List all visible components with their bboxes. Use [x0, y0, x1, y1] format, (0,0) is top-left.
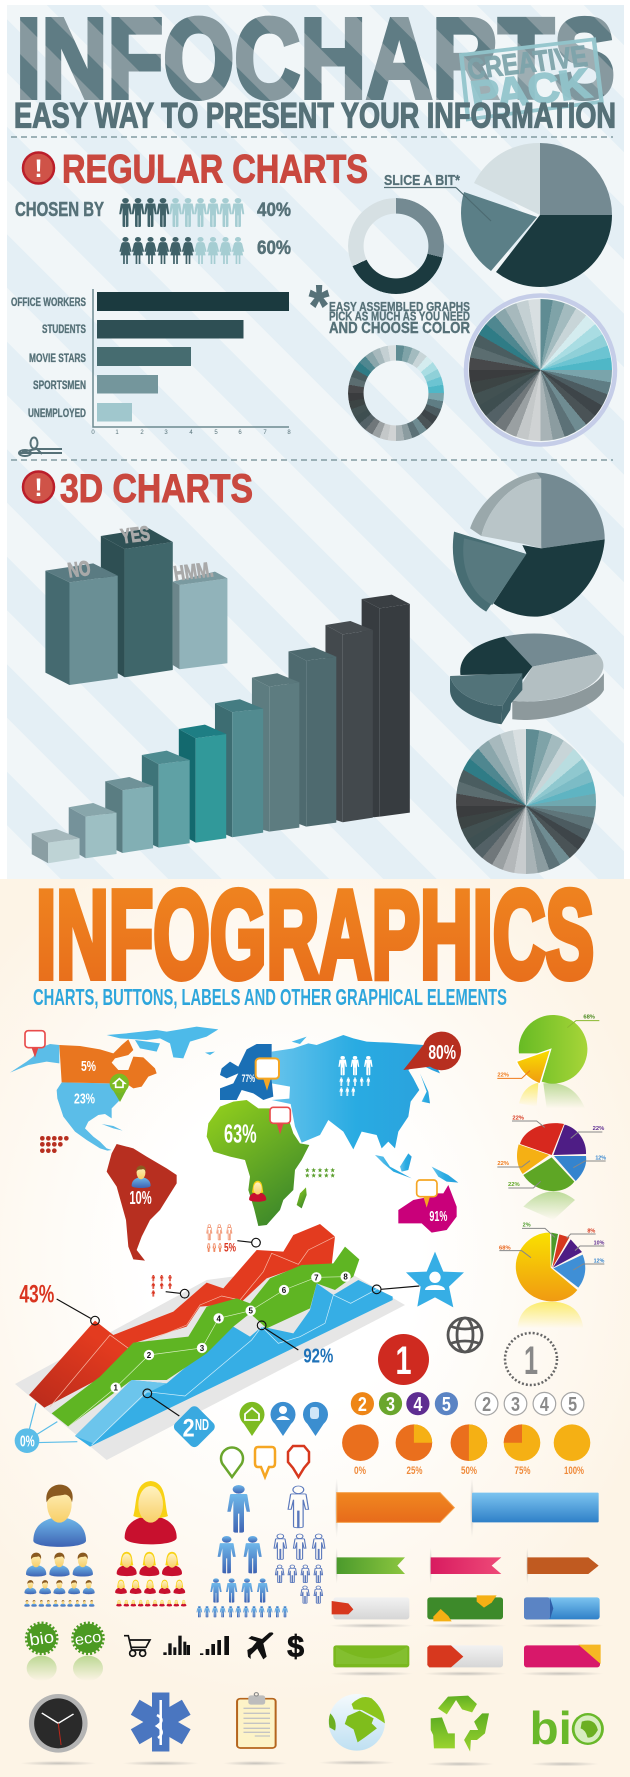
pie: green and yellow: 22%: [497, 1072, 509, 1078]
icon: clock: [29, 1694, 88, 1753]
world map: [10, 1027, 461, 1261]
numbered circles colored: [351, 1392, 458, 1416]
heading: 3d charts: !: [34, 474, 43, 502]
progress circles: 75%: [514, 1465, 531, 1477]
pie: yellow majority: 8%: [587, 1228, 595, 1234]
bar chart: 2: [140, 430, 144, 436]
label: 43 percent: 43%: [19, 1281, 54, 1309]
icon: scissors: [19, 438, 62, 456]
person icon on south america: [132, 1166, 151, 1188]
pin icons filled: [240, 1402, 328, 1436]
map: canada: [59, 1039, 157, 1088]
3d bars: no yes hmm: [45, 521, 227, 685]
avatars and people pyramids: [24, 1481, 325, 1681]
numbered circles colored: 3: [386, 1394, 395, 1416]
male avatars: [24, 1485, 95, 1607]
map labels: 63%: [224, 1119, 257, 1149]
zero percent badge: [15, 1403, 77, 1453]
bar chart: 1: [115, 430, 119, 436]
3d pie exploded: [453, 472, 605, 617]
asterisk note: EASY ASSEMBLED GRAPHS: [329, 299, 470, 314]
people row: 40 percent: [119, 198, 244, 227]
3d pie tilted: [450, 634, 604, 724]
icon: bio: bi: [530, 1702, 572, 1754]
3d line chart: 8: [343, 1273, 348, 1282]
zero percent badge: 0%: [20, 1434, 35, 1451]
pie legend charts: [497, 1015, 606, 1328]
ribbon: green: [337, 1557, 405, 1574]
button: blue split: [524, 1597, 600, 1619]
pin icons outline: [221, 1446, 309, 1477]
bar chart: 8: [287, 430, 291, 436]
label: 92 percent: 92%: [303, 1345, 333, 1368]
callout: 80 percent: 80%: [428, 1041, 456, 1064]
diamond 2nd: [172, 1404, 217, 1449]
3d line chart: 5: [248, 1307, 253, 1316]
3d bars: no yes hmm: YES: [119, 521, 152, 548]
map labels: 91%: [429, 1208, 447, 1225]
pin: yellow australia: [417, 1180, 437, 1208]
heading: regular charts: !: [34, 155, 43, 183]
map labels: [74, 1059, 447, 1225]
icon: plane: [247, 1632, 273, 1659]
pie: yellow majority: [499, 1223, 604, 1328]
bar chart: STUDENTS: [42, 324, 86, 336]
ribbon shadows: [335, 1478, 529, 1584]
red dot grid: [40, 1136, 69, 1153]
button: gray with red arrow: [427, 1645, 503, 1667]
panel: infocharts striped background: [7, 5, 624, 879]
map: australia: [398, 1185, 457, 1233]
numbered circles outline: 3: [511, 1394, 520, 1416]
heading: regular charts: REGULAR CHARTS: [62, 148, 368, 192]
3d bars: no yes hmm: HMM.: [172, 557, 215, 585]
map: south america: [107, 1144, 177, 1261]
button shadows: [330, 1623, 603, 1676]
outline people with 5 percent: [207, 1225, 236, 1255]
number badge 1 red: [378, 1334, 429, 1385]
outline people with 5 percent: 5%: [224, 1241, 236, 1255]
bar chart: 0: [91, 430, 95, 436]
button: gray with red tag: [332, 1597, 409, 1619]
diamond 2nd: 2: [183, 1416, 195, 1443]
3d line chart: 7: [314, 1273, 319, 1282]
numbered circles outline: 5: [568, 1394, 577, 1416]
blue ribbon: [75, 1280, 393, 1447]
ribbon: brown: [527, 1557, 599, 1574]
map labels: 10%: [129, 1187, 152, 1208]
button: green plain: [333, 1645, 409, 1667]
bar chart: 7: [263, 430, 267, 436]
chosen by label: CHOSEN BY: [15, 199, 104, 221]
button: pink with yellow fold: [524, 1645, 601, 1667]
woman icon on africa: [249, 1181, 266, 1202]
map labels: 5%: [81, 1059, 96, 1075]
bar chart: 5: [214, 430, 218, 436]
pin: green home: [110, 1074, 129, 1102]
numbered circles colored: 5: [442, 1394, 451, 1416]
asterisk note: [309, 274, 470, 339]
pie: multicolor: [469, 299, 612, 441]
pie: five slices: 22%: [497, 1161, 509, 1167]
icon: rising bars: [200, 1636, 229, 1655]
bar chart: UNEMPLOYED: [28, 408, 86, 420]
pie: yellow majority: 2%: [523, 1223, 531, 1229]
map labels: 23%: [74, 1091, 95, 1107]
bar chart: MOVIE STARS: [29, 353, 86, 365]
40 percent label: 40%: [257, 200, 291, 221]
slice a bit annotation: SLICE A BIT*: [384, 172, 460, 189]
button: green with yellow corners: [427, 1595, 503, 1621]
pie: yellow majority: 10%: [594, 1240, 604, 1246]
map: europe: [220, 1044, 273, 1100]
map: asia: [272, 1035, 458, 1183]
icon: cart: [124, 1636, 150, 1656]
numbered circles colored: 4: [413, 1394, 423, 1416]
icon: bars: [163, 1636, 190, 1655]
ground shadows: [20, 1760, 599, 1766]
numbered circles colored: 2: [358, 1394, 367, 1416]
icon: clipboard: [237, 1693, 276, 1748]
numbered circles outline: [475, 1392, 584, 1416]
multicolor pie ring: [466, 296, 615, 444]
badge: bio: [26, 1623, 57, 1681]
numbered circles outline: 2: [482, 1394, 491, 1416]
pie: five slices: 22%: [512, 1115, 524, 1121]
3d line chart: 6: [282, 1286, 287, 1295]
callout: 80 percent: [403, 1032, 461, 1070]
numbered circles outline: 4: [540, 1394, 550, 1416]
people row: 60 percent: [119, 237, 244, 264]
icon: dollar: $: [287, 1630, 304, 1664]
bottom icon row: [20, 1693, 604, 1766]
3d bars: no yes hmm: NO: [66, 556, 92, 582]
badge: eco: eco: [74, 1629, 102, 1649]
icon: recycle: [431, 1696, 489, 1752]
small red people: [152, 1275, 172, 1297]
female avatars: [115, 1481, 186, 1606]
3d line chart: 2: [147, 1351, 152, 1360]
3d line chart: 4: [216, 1314, 221, 1323]
bar chart: 4: [189, 430, 193, 436]
donut: multicolor: [348, 345, 444, 441]
badge: eco: [73, 1623, 103, 1681]
pie: five slices: 12%: [595, 1155, 606, 1161]
asterisk note: AND CHOOSE COLOR: [329, 320, 470, 337]
progress circles: 0%: [354, 1465, 366, 1477]
3d staircase bar chart: [32, 595, 410, 863]
icon: bio: [530, 1702, 604, 1754]
pie: yellow majority: 68%: [499, 1245, 511, 1251]
white people on asia: [338, 1056, 373, 1096]
icon: globe: [448, 1318, 482, 1352]
ribbon: orange arrow: [337, 1493, 454, 1522]
pie: five slices: [497, 1115, 606, 1220]
diamond 2nd: ND: [195, 1417, 209, 1434]
progress circles: 25%: [406, 1465, 423, 1477]
bar chart: OFFICE WORKERS: [11, 297, 86, 309]
green star grid: [305, 1168, 335, 1178]
number badge 1 dotted: [505, 1333, 557, 1385]
bar chart: SPORTSMEN: [33, 380, 86, 392]
red ribbon: [29, 1224, 335, 1408]
pin: yellow europe: [256, 1058, 279, 1091]
map: alaska and usa: [10, 1044, 128, 1151]
pin: red top left: [25, 1031, 45, 1058]
heading: 3d charts: 3D CHARTS: [60, 467, 253, 511]
map labels: 77%: [242, 1073, 255, 1085]
3d line chart: 1: [113, 1384, 118, 1393]
outline figure pyramid: [274, 1486, 325, 1603]
pie: five slices: 22%: [508, 1182, 520, 1188]
map: africa: [207, 1100, 309, 1226]
3d line chart: 3: [200, 1344, 205, 1353]
divider: [11, 459, 613, 461]
badge: bio: bio: [28, 1627, 55, 1650]
blue figure pyramid: [196, 1485, 288, 1617]
pin: red africa: [270, 1107, 290, 1134]
star badge: [406, 1252, 464, 1307]
ribbons and buttons: [330, 1478, 603, 1676]
number badge 1 dotted: 1: [524, 1339, 538, 1383]
donut: three slices: [348, 198, 444, 294]
icon: earth: [329, 1694, 385, 1751]
stamp: creative pack: PACK: [467, 59, 594, 120]
bar chart: [11, 289, 291, 436]
asterisk note: PICK AS MUCH AS YOU NEED: [329, 310, 470, 324]
progress circles: [342, 1424, 590, 1477]
green ribbon: [52, 1247, 359, 1427]
divider: [11, 136, 613, 138]
ribbon: pink: [431, 1557, 501, 1574]
pie: yellow majority: 12%: [594, 1259, 604, 1265]
map: arctic islands: [107, 1027, 307, 1058]
number badge 1 red: 1: [396, 1339, 412, 1383]
3d pie multicolor: [456, 729, 596, 874]
pie chart: sliced: [456, 143, 612, 287]
progress circles: 100%: [564, 1465, 584, 1477]
icon: star of life: [131, 1692, 191, 1752]
asterisk note: *: [309, 274, 329, 339]
pie: green and yellow: [497, 1015, 599, 1108]
pie: green and yellow: 68%: [583, 1015, 595, 1021]
callout rings and leader lines: [57, 1238, 419, 1416]
3d line chart: [15, 1224, 464, 1460]
pie: five slices: 22%: [593, 1126, 604, 1132]
panel: infographics cream background: [0, 879, 630, 1777]
bar chart: 6: [238, 430, 242, 436]
progress circles: 50%: [461, 1465, 477, 1477]
bar chart: 3: [164, 430, 168, 436]
60 percent label: 60%: [257, 238, 291, 259]
ribbon: blue: [472, 1493, 599, 1522]
chart number markers: [111, 1272, 351, 1393]
